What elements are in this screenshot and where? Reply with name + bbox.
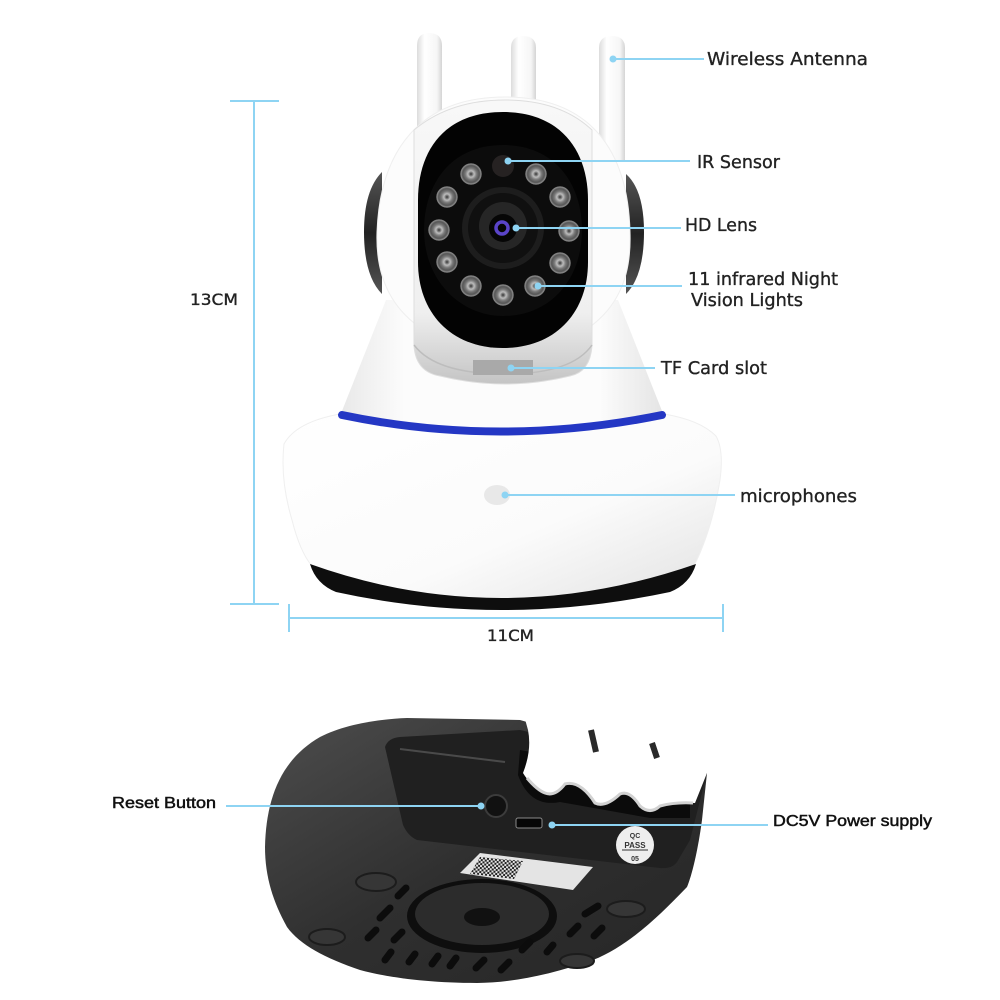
callout: wireless antenna xyxy=(610,49,868,70)
blue LED ring xyxy=(342,415,662,432)
callout: DC5V power supply xyxy=(548,813,932,830)
lens xyxy=(462,187,544,269)
callout: HD lens xyxy=(512,215,757,236)
TF card slot door xyxy=(473,360,533,375)
dimension: width 11CM: 11CM xyxy=(487,626,534,645)
DC power port xyxy=(516,818,542,828)
QR label xyxy=(460,853,593,890)
callout: infrared lights: 11 infrared Night xyxy=(688,269,838,290)
callout: wireless antenna: Wireless Antenna xyxy=(707,49,868,70)
callout: TF card slot: TF Card slot xyxy=(660,358,767,379)
callout: microphones xyxy=(484,485,857,507)
callout: IR sensor xyxy=(504,152,781,173)
callout: HD lens: HD Lens xyxy=(685,215,757,236)
QC pass sticker: PASS xyxy=(624,841,646,850)
infrared night vision lights xyxy=(428,164,580,306)
black lens face xyxy=(418,112,588,348)
callout: DC5V power supply: DC5V Power supply xyxy=(773,813,932,830)
base underside xyxy=(265,718,707,983)
QC pass sticker: 05 xyxy=(631,856,639,863)
callout: infrared lights xyxy=(534,269,838,311)
IR sensor xyxy=(492,155,514,177)
QC pass sticker xyxy=(616,826,654,864)
callout: TF card slot xyxy=(508,358,767,379)
callout: reset button xyxy=(112,795,484,812)
vent slots xyxy=(368,888,602,970)
centre screw ring xyxy=(407,879,557,953)
camera neck xyxy=(340,300,664,433)
camera base xyxy=(283,414,721,599)
top camera photo xyxy=(283,33,721,610)
side dark pods xyxy=(364,172,644,294)
QC pass sticker: QC xyxy=(630,833,640,840)
dimension: height 13CM: 13CM xyxy=(190,290,238,309)
icon: antennas xyxy=(417,33,625,160)
callout: IR sensor: IR Sensor xyxy=(697,152,781,173)
bottom view photo xyxy=(265,679,730,983)
dimension: height 13CM xyxy=(190,101,279,604)
callout: microphones: microphones xyxy=(740,486,857,507)
camera head xyxy=(377,97,630,360)
rear port recess xyxy=(385,730,707,868)
rubber feet xyxy=(309,873,645,968)
reset button xyxy=(485,795,507,817)
antenna connector shadows xyxy=(518,750,690,818)
face bracket xyxy=(414,100,592,384)
icon: lower antennas xyxy=(517,679,730,810)
callout: reset button: Reset Button xyxy=(112,795,216,812)
callout: infrared lights: Vision Lights xyxy=(691,290,803,311)
dimension: width 11CM xyxy=(289,604,723,645)
black underside xyxy=(310,564,696,610)
